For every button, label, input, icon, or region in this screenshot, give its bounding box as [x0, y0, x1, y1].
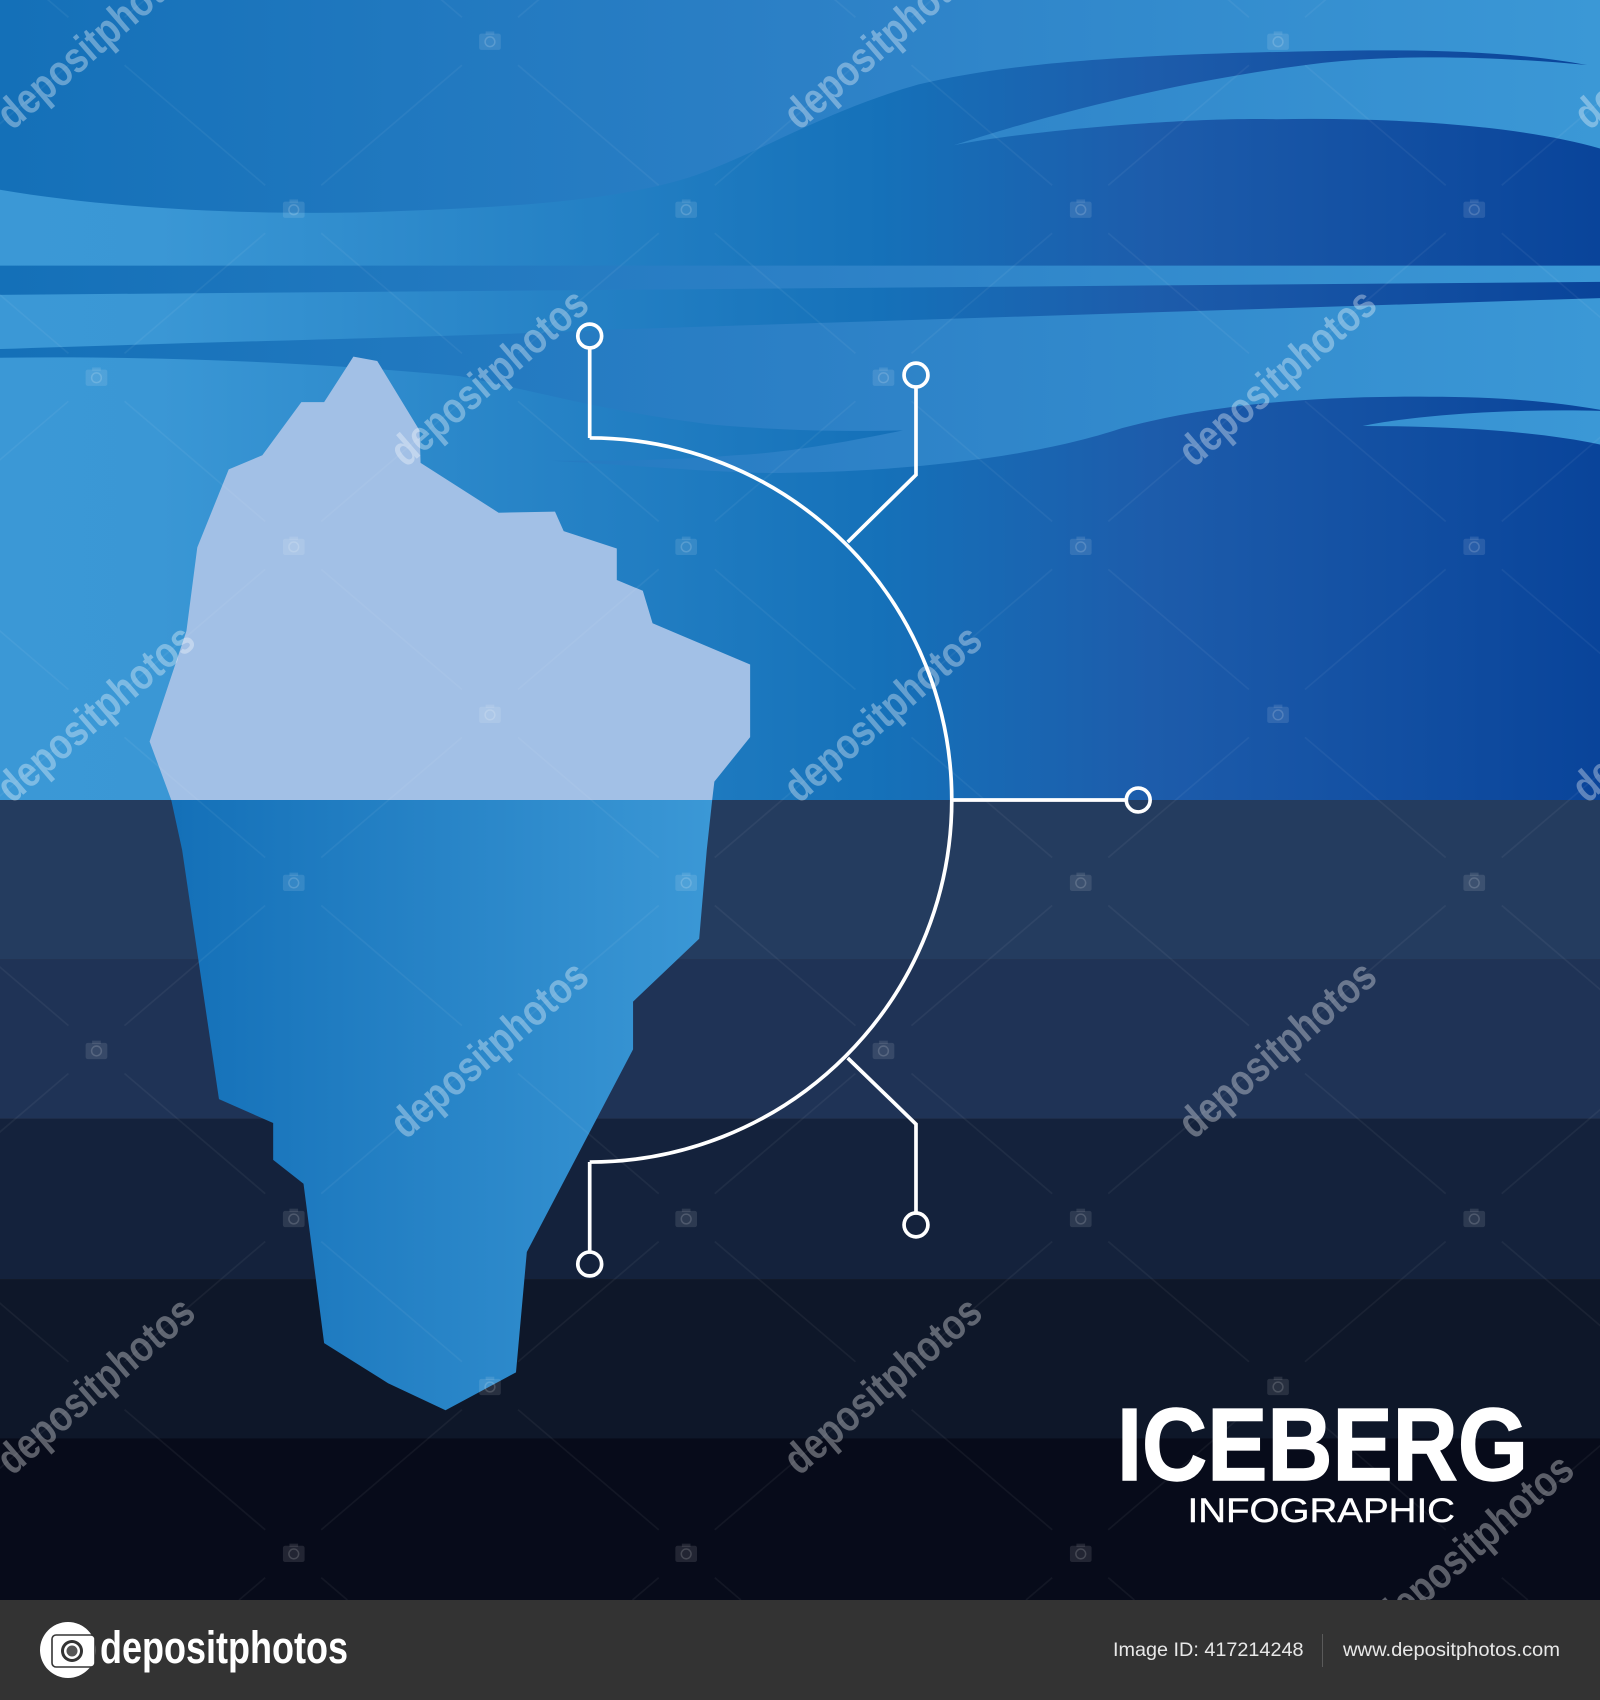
title: ICEBERG: ICEBERG [1117, 1387, 1528, 1502]
node: top [578, 324, 602, 438]
node: lower right [848, 1058, 928, 1237]
diagonal watermark text: depositphotos [381, 951, 598, 1148]
upper wave layer [0, 50, 1600, 266]
diagonal watermark text: depositphotos [774, 615, 991, 812]
diagonal watermark text: depositphotos [381, 279, 598, 476]
diagonal watermark text: depositphotos [1169, 951, 1386, 1148]
iceberg above water [150, 357, 750, 800]
footer divider [1322, 1634, 1323, 1667]
watermark camera icons [86, 31, 1485, 1562]
node: upper right [848, 363, 928, 542]
sky base gradient [0, 0, 1600, 473]
semicircle connector diagram [578, 324, 1150, 1276]
footer logo icon [40, 1622, 96, 1678]
node: middle [952, 788, 1150, 812]
subtitle: INFOGRAPHIC: INFOGRAPHIC [1188, 1492, 1455, 1530]
horizontal wedge layer [0, 282, 1600, 349]
lower wave layer [0, 357, 1600, 800]
main arc [590, 438, 952, 1162]
diagonal watermark text: depositphotos [1169, 279, 1386, 476]
footer logo wordmark: depositphotos [100, 1622, 348, 1673]
iceberg below water [171, 800, 712, 1410]
footer image id: Image ID: 417214248 [1113, 1639, 1304, 1661]
ocean depth bands [0, 800, 1600, 1600]
diagonal watermark text: depositphotos [774, 1287, 991, 1484]
footer bar [0, 1600, 1600, 1700]
small light wave accent [1363, 410, 1600, 444]
footer website: www.depositphotos.com [1342, 1639, 1560, 1661]
node: bottom [578, 1162, 602, 1276]
